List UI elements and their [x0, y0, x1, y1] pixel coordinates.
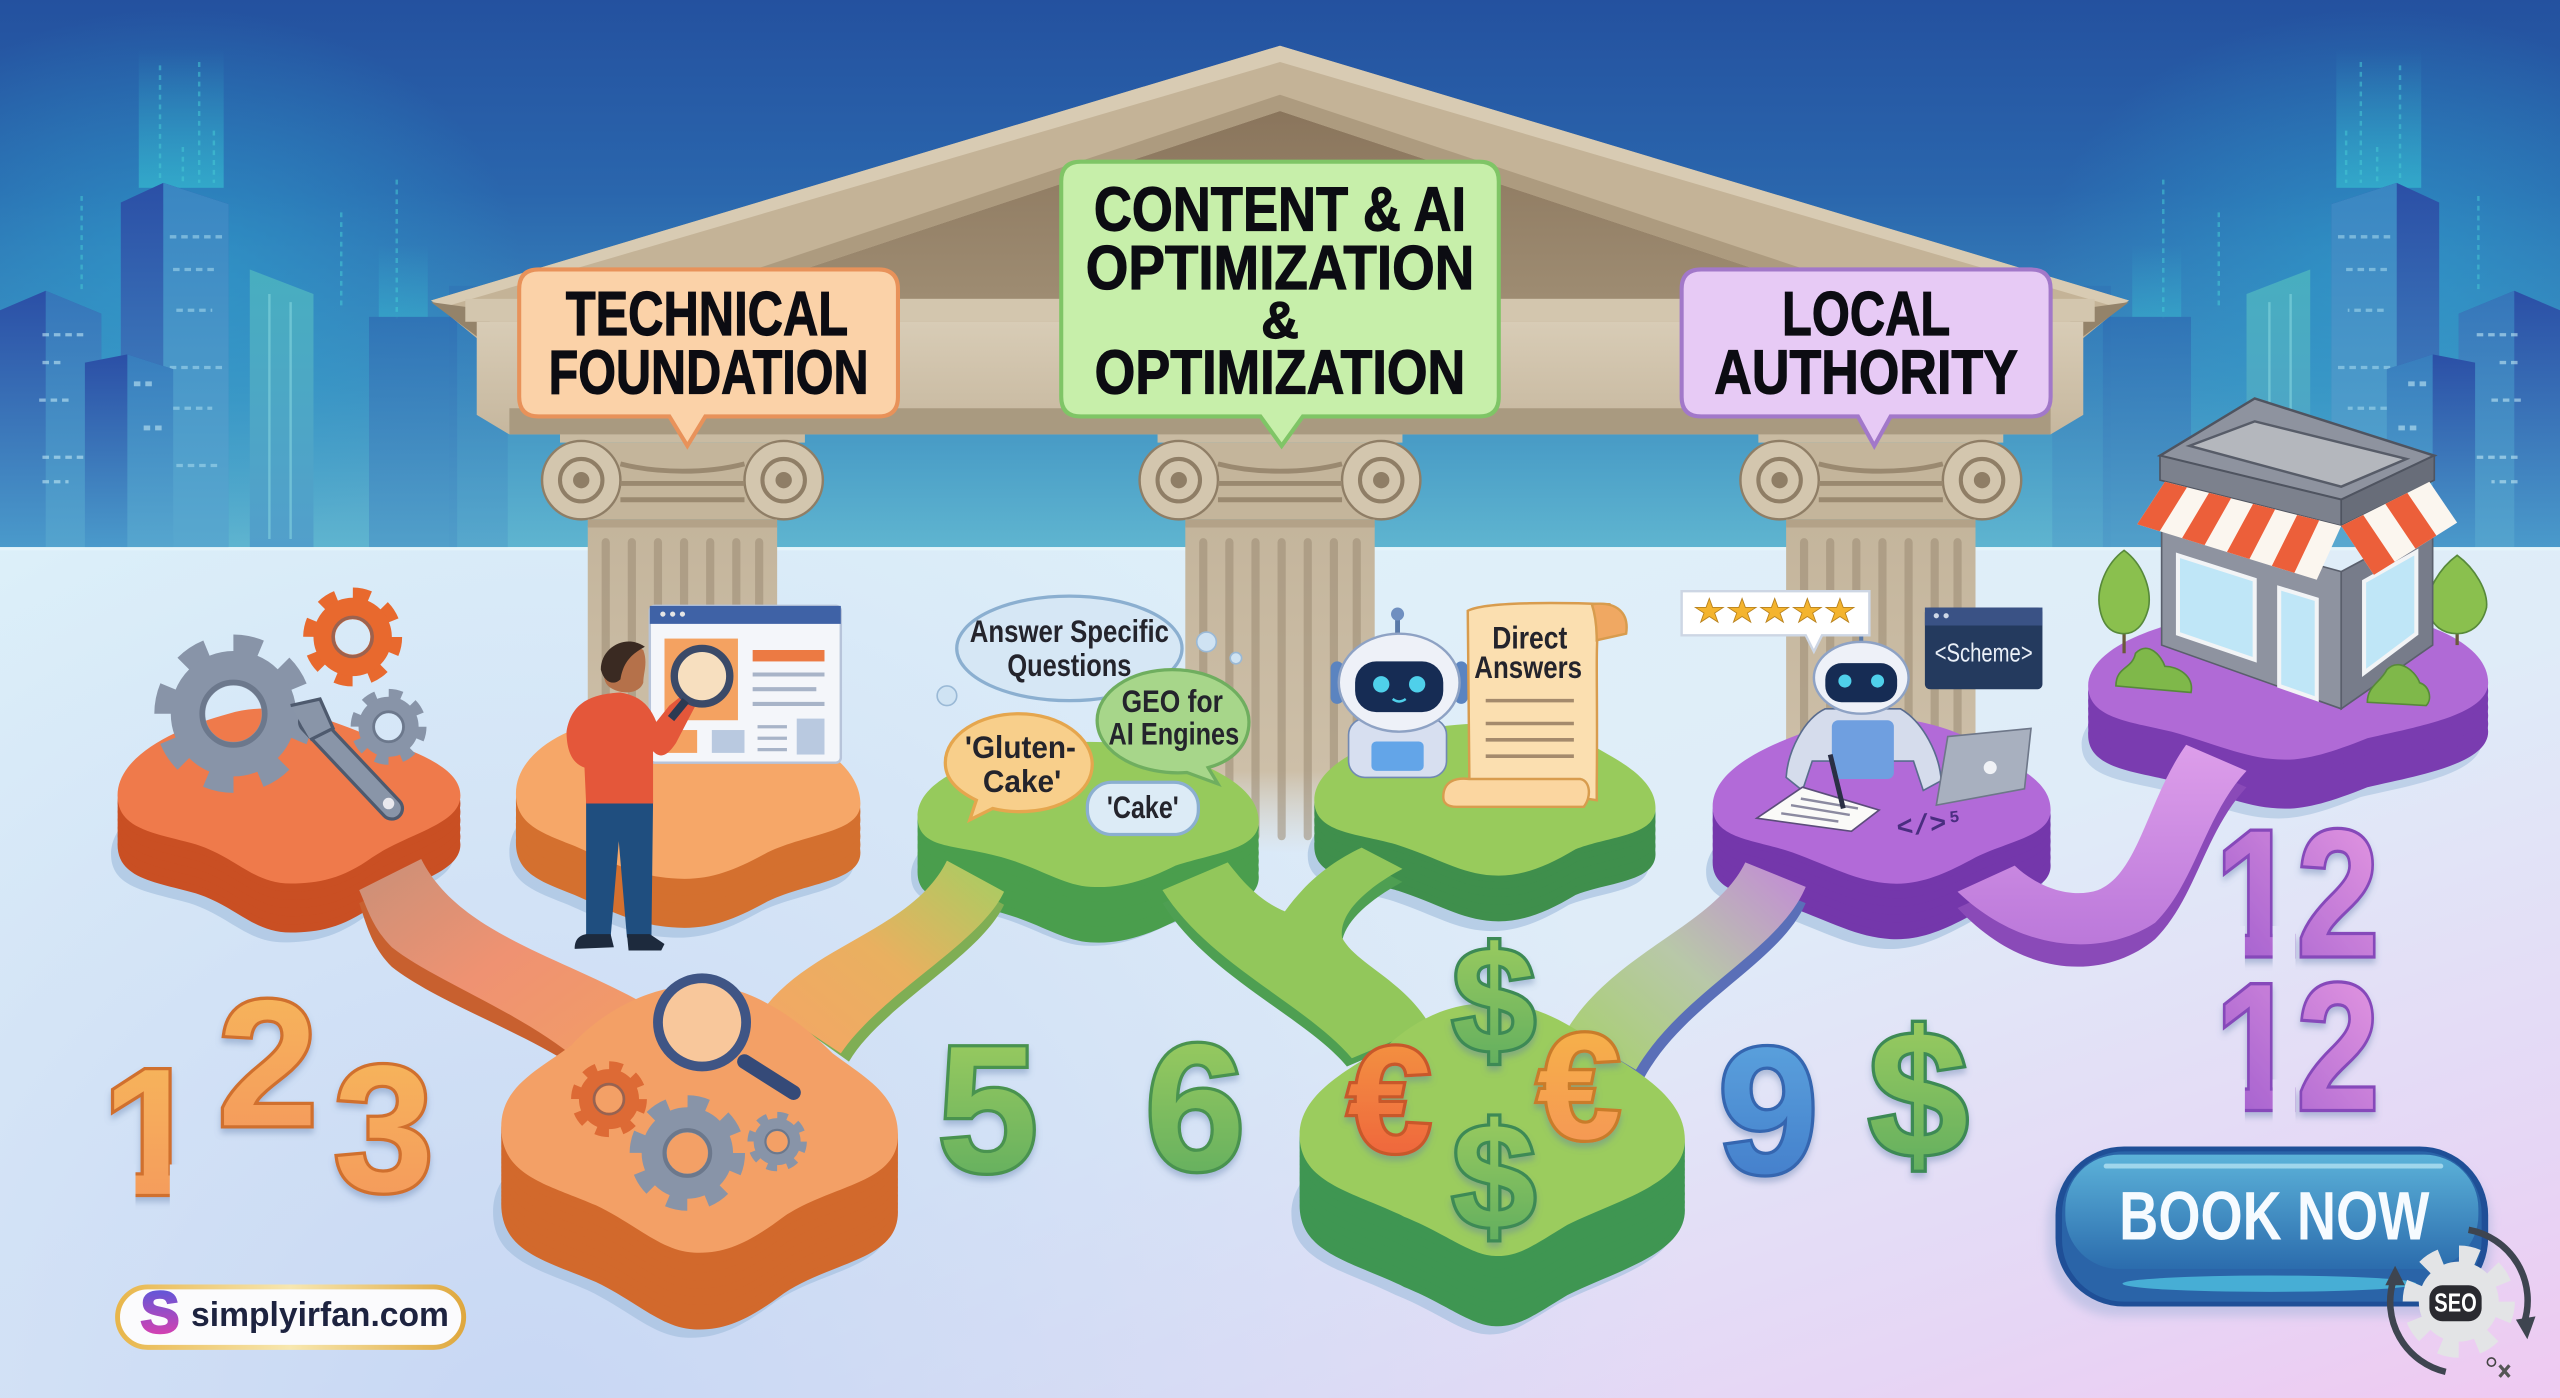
icon: browser window [650, 606, 841, 763]
number 1: 1 [102, 1032, 202, 1233]
number 12 upper: 12 [2216, 793, 2379, 994]
roof pediment [431, 46, 2129, 338]
background: ground [0, 547, 2560, 1398]
platform: technical 2 person [509, 606, 860, 951]
label: local authority: AUTHORITY [1714, 339, 2018, 408]
connector: purple platform to store platform [1958, 745, 2247, 967]
bubble: GEO for AI Engines [1097, 670, 1249, 784]
decorative thought bubbles [937, 632, 1242, 706]
icon: SEO gear badge: SEO [2434, 1287, 2477, 1317]
label: local authority [1682, 269, 2051, 446]
number 5: 5 [938, 1009, 1038, 1210]
currency: dollar top: $ [1452, 916, 1536, 1084]
icon: scroll direct answers: Direct [1492, 620, 1567, 655]
button: book now: BOOK NOW [2119, 1178, 2430, 1255]
icon: wrench [291, 699, 394, 809]
number 12 lower: 12 [2216, 947, 2379, 1148]
platform: green direct answers [1308, 603, 1656, 931]
icon: robot [1331, 608, 1468, 777]
bubble: GEO for AI Engines: AI Engines [1109, 717, 1239, 752]
button: book now [2047, 1146, 2491, 1316]
logo: simplyirfan.com [118, 1281, 464, 1347]
scheme code box: <Scheme> [1935, 637, 2033, 667]
icon: S logo mark: S [140, 1281, 180, 1346]
icon: code tag: </>⁵ [1895, 808, 1965, 845]
label: content and AI optimization: OPTIMIZATION [1095, 339, 1465, 408]
bubble: Gluten-Cake: 'Gluten- [965, 730, 1076, 765]
awning left [2137, 482, 2341, 580]
label: content and AI optimization: OPTIMIZATION [1086, 234, 1474, 303]
icon: paper [1757, 755, 1879, 831]
awning right [2341, 482, 2457, 575]
icon: robot writing [1786, 625, 1941, 790]
icon: grey gear [638, 1104, 736, 1202]
icon: right tree [2428, 555, 2487, 645]
bubble: answer specific questions: Questions [1007, 648, 1131, 683]
review bubble with stars [1682, 591, 1869, 652]
bubble: answer specific questions: Answer Specific [970, 614, 1169, 649]
bubble: Gluten-Cake: Cake' [983, 764, 1061, 799]
platform: green content bubbles [911, 742, 1259, 946]
dollar sign: $ [1868, 994, 1968, 1195]
review bubble with stars: ★★★★★ [1693, 592, 1856, 630]
temple [431, 46, 2129, 853]
number 3: 3 [334, 1029, 434, 1230]
background: sky [0, 0, 2560, 549]
bubble: answer specific questions [957, 596, 1182, 701]
column center [1140, 420, 1420, 853]
currency: dollar bottom: $ [1452, 1092, 1536, 1260]
icon: small grey gear [752, 1116, 802, 1167]
column right [1740, 420, 2021, 853]
icon: orange gear [311, 595, 395, 679]
connector: big green platform to purple platform [1567, 862, 1806, 1081]
platform: purple local authority [1706, 625, 2051, 949]
icon: scroll direct answers: Answers [1474, 650, 1582, 685]
icon: orange gear [577, 1067, 641, 1131]
currency: euro right: € [1537, 1002, 1621, 1170]
icon: large gear [166, 646, 301, 781]
label: local authority: LOCAL [1782, 280, 1950, 349]
icon: small gear [356, 694, 421, 759]
icon: store building [2137, 398, 2457, 709]
icon: laptop [1936, 728, 2031, 805]
number 2: 2 [218, 963, 318, 1164]
number 9: 9 [1718, 1011, 1818, 1212]
bubble: GEO for AI Engines: GEO for [1122, 684, 1223, 719]
platform: big green [1291, 916, 1685, 1334]
bubble: Cake: 'Cake' [1107, 790, 1179, 825]
icon: SEO gear badge [2385, 1230, 2536, 1377]
platform: big orange [493, 978, 898, 1338]
scheme code box [1925, 608, 2042, 689]
connector: red platform to big orange platform [359, 859, 637, 1065]
platform: technical 1 gears [111, 595, 460, 942]
platform: store [2082, 398, 2488, 818]
icon: person with magnifier [567, 642, 730, 951]
icon: scroll direct answers [1443, 603, 1627, 807]
entablature [465, 299, 2095, 434]
icon: left tree [2099, 550, 2149, 653]
column left [542, 420, 823, 853]
city skyline left [0, 8, 522, 547]
number 6: 6 [1145, 1007, 1245, 1208]
label: content and AI optimization: & [1261, 292, 1299, 350]
label: technical foundation: TECHNICAL [566, 280, 848, 349]
label: technical foundation: FOUNDATION [549, 339, 869, 408]
icon: bushes [2116, 648, 2430, 706]
connector: green platforms merging into big green platform [1162, 848, 1430, 1066]
label: content and AI optimization: CONTENT & AI [1094, 175, 1466, 244]
label: content and AI optimization [1061, 162, 1499, 446]
city skyline right [2038, 8, 2560, 547]
logo wordmark: simplyirfan.com [191, 1296, 449, 1334]
icon: magnifier [658, 978, 793, 1093]
connector: big orange platform to green platform [767, 861, 1004, 1062]
bubble: Cake [1087, 782, 1198, 835]
label: technical foundation [519, 269, 898, 446]
currency: euro left: € [1348, 1015, 1431, 1183]
bubble: Gluten-Cake [945, 714, 1092, 820]
